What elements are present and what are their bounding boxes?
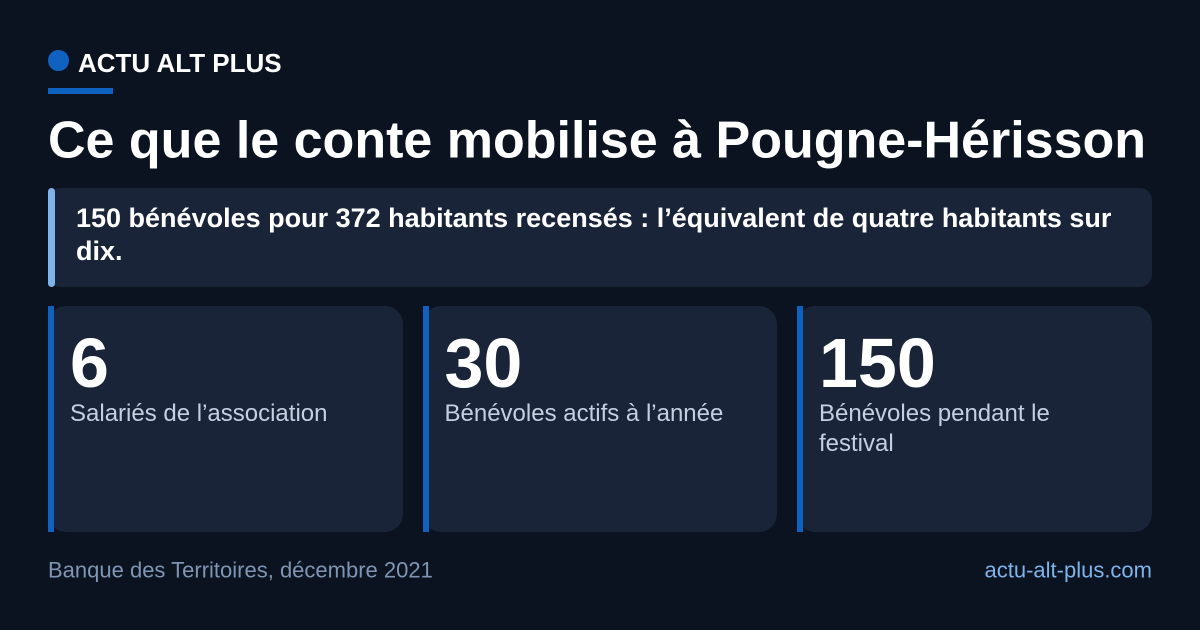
- callout text: [76, 202, 1111, 266]
- stat label: festival: [819, 430, 894, 457]
- stat label: [819, 400, 1050, 457]
- stat number: 150: [819, 324, 936, 402]
- stat number: 6: [70, 324, 109, 402]
- icon: brand dot: [48, 50, 68, 70]
- callout text: dix.: [76, 236, 123, 266]
- brand underline: [48, 88, 112, 94]
- callout accent bar: [48, 188, 55, 287]
- stat label: Bénévoles actifs à l’année: [444, 400, 723, 427]
- source: Banque des Territoires, décembre 2021: [48, 558, 433, 582]
- callout background: [48, 188, 1152, 287]
- stat card: bénévoles actifs: [423, 306, 777, 532]
- stat label: Bénévoles pendant le: [819, 400, 1050, 427]
- website: actu-alt-plus.com: [984, 558, 1152, 582]
- brand name: ACTU ALT PLUS: [78, 48, 282, 78]
- stat card: salariés: [48, 306, 403, 532]
- stat number: 30: [444, 324, 522, 402]
- callout text: 150 bénévoles pour 372 habitants recensés : l’équivalent de quatre habitants sur: [76, 202, 1111, 232]
- callout: [48, 188, 1152, 287]
- stat label: Salariés de l’association: [70, 400, 327, 427]
- stat card: bénévoles festival: [797, 306, 1152, 532]
- title: Ce que le conte mobilise à Pougne-Hérisson: [48, 112, 1146, 170]
- brand header: [48, 48, 282, 94]
